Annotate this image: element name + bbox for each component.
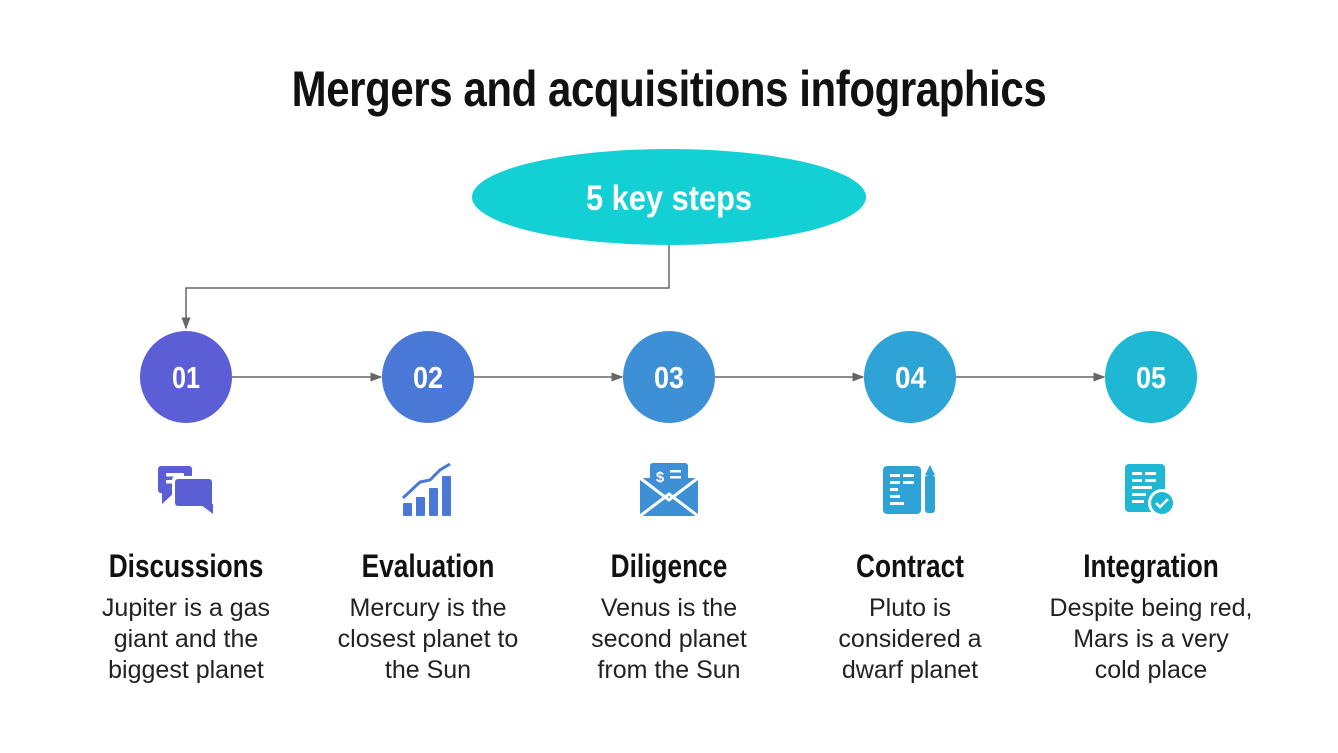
text: Integration: Despite being red, (1050, 594, 1252, 622)
circles (140, 331, 1197, 423)
arrow: connector to step 1 (186, 245, 669, 328)
text: Evaluation: Mercury is the (350, 594, 506, 622)
icon: contract (883, 465, 935, 514)
text: Contract (838, 548, 982, 684)
text: Diligence: Venus is the (601, 594, 737, 622)
arrows between steps (232, 376, 1104, 378)
text: Diligence: from the Sun (597, 656, 741, 684)
text: Integration (1050, 548, 1252, 684)
text: Diligence: Diligence (611, 548, 727, 584)
ellipse: 5 key steps (472, 149, 866, 245)
icon: document check (1125, 464, 1176, 517)
icon: chart (403, 464, 451, 516)
title: Mergers and acquisitions infographics (292, 61, 1046, 117)
circles: 03 (654, 360, 684, 395)
icon: envelope (640, 463, 698, 516)
text: Integration: Integration (1083, 548, 1219, 584)
text: Discussions: biggest planet (108, 656, 264, 684)
text: Contract: considered a (838, 625, 982, 653)
text: Diligence (591, 548, 747, 684)
circles: 04 (895, 360, 927, 395)
text: Discussions: Discussions (109, 548, 263, 584)
text: Evaluation: the Sun (385, 656, 471, 684)
text: Diligence: second planet (591, 625, 747, 653)
text: Evaluation: Evaluation (362, 548, 494, 584)
icon: chat (158, 466, 215, 514)
circles: 01 (172, 360, 200, 395)
text: Integration: Mars is a very (1073, 625, 1229, 653)
text: Evaluation: closest planet to (338, 625, 518, 653)
text: Contract: dwarf planet (842, 656, 978, 684)
text: Contract: Contract (856, 548, 964, 584)
text: Evaluation (338, 548, 518, 684)
text: Discussions (102, 548, 270, 684)
ellipse: 5 key steps: 5 key steps (586, 179, 752, 218)
text: Discussions: giant and the (114, 625, 258, 653)
icon: envelope: $ (656, 469, 665, 486)
text: Discussions: Jupiter is a gas (102, 594, 270, 622)
circles: 05 (1136, 360, 1166, 395)
text: Integration: cold place (1095, 656, 1207, 684)
circles: 02 (413, 360, 443, 395)
text: Contract: Pluto is (869, 594, 951, 622)
